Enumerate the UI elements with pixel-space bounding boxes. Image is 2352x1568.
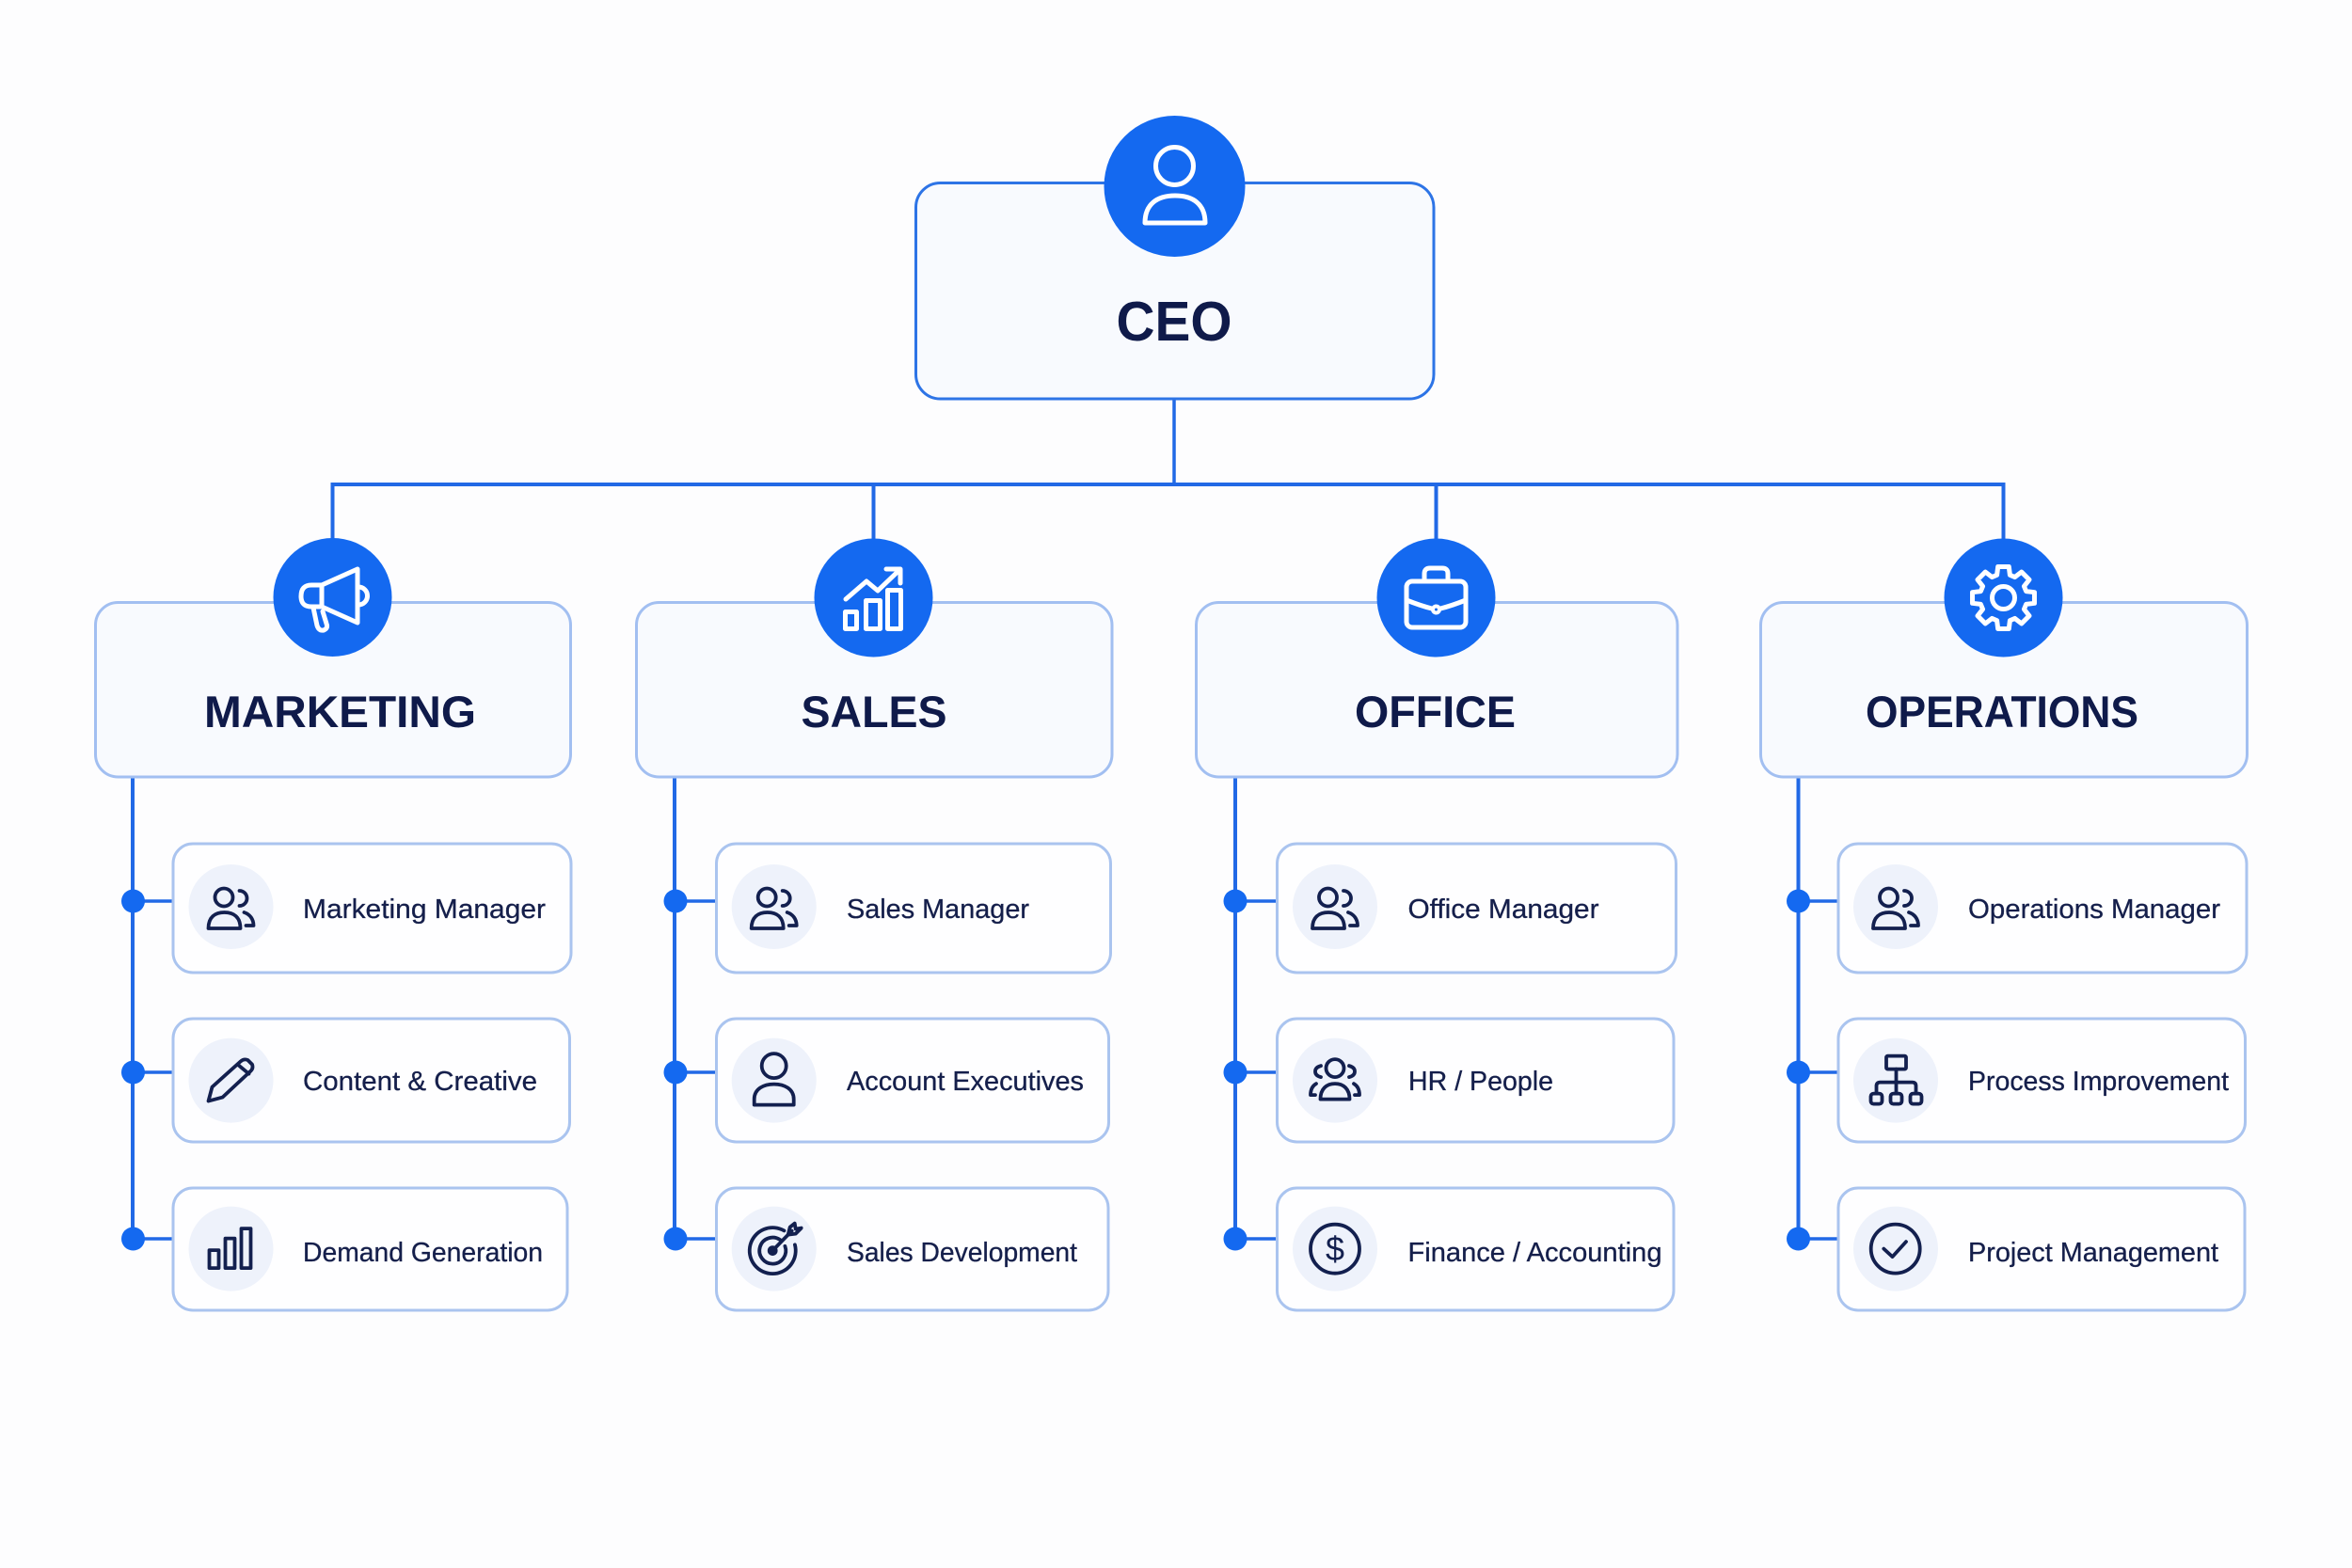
CEO box — [916, 182, 1434, 399]
item: Process Improvement: Process Improvement — [1968, 1067, 2229, 1097]
icon: dollar — [1311, 1225, 1359, 1274]
item: Sales Development — [717, 1188, 1108, 1310]
item: Office Manager: Office Manager — [1407, 895, 1599, 925]
item: HR / People: HR / People — [1408, 1067, 1553, 1097]
connector: CEO to departments — [333, 399, 2004, 541]
icon: manager people — [209, 888, 254, 928]
connector: Office spine — [1223, 777, 1277, 1251]
heading: Operations: OPERATIONS — [1866, 687, 2138, 736]
heading: CEO: CEO — [1116, 291, 1232, 353]
item: HR / People — [1278, 1019, 1674, 1142]
item: Finance / Accounting: Finance / Accounting — [1407, 1238, 1661, 1268]
icon: megaphone — [273, 538, 391, 657]
icon: gear — [1944, 538, 2062, 657]
panel: Marketing column — [96, 538, 571, 1310]
icon: team — [1311, 1059, 1359, 1100]
icon: growth chart — [815, 538, 933, 657]
item: Sales Manager: Sales Manager — [847, 895, 1029, 925]
item: Content & Creative: Content & Creative — [303, 1067, 537, 1097]
icon: person — [755, 1053, 794, 1105]
icon: CEO person — [1104, 116, 1246, 257]
heading: Office: OFFICE — [1355, 687, 1516, 736]
item: Project Management — [1838, 1188, 2245, 1310]
icon: org structure — [1870, 1056, 1921, 1104]
item: Demand Generation: Demand Generation — [303, 1238, 543, 1268]
icon: dollar: $ — [1326, 1229, 1344, 1268]
item: Demand Generation — [173, 1188, 567, 1310]
item: Operations Manager — [1838, 844, 2247, 973]
connector: Sales spine — [664, 777, 716, 1251]
department box: Sales — [636, 602, 1112, 777]
item: Marketing Manager: Marketing Manager — [303, 895, 546, 925]
item: Sales Manager — [717, 844, 1110, 973]
item: Marketing Manager — [173, 844, 571, 973]
item: Finance / Accounting — [1278, 1188, 1674, 1310]
icon: bar chart — [209, 1228, 250, 1268]
heading: Sales: SALES — [802, 687, 946, 736]
connector: Operations spine — [1787, 777, 1838, 1251]
icon: check circle — [1871, 1225, 1920, 1274]
icon: manager people — [752, 888, 797, 928]
department box: Office — [1197, 602, 1677, 777]
item: Account Executives: Account Executives — [847, 1067, 1084, 1097]
item: Operations Manager: Operations Manager — [1968, 895, 2220, 925]
department box: Operations — [1761, 602, 2247, 777]
department box: Marketing — [96, 602, 570, 777]
icon: manager people — [1873, 888, 1918, 928]
item: Office Manager — [1278, 844, 1677, 973]
panel: CEO — [916, 116, 1434, 399]
heading: Marketing: MARKETING — [204, 687, 476, 736]
icon: pencil — [209, 1059, 252, 1101]
panel: Sales column — [636, 538, 1112, 1310]
icon: manager people — [1312, 888, 1358, 928]
item: Process Improvement — [1838, 1019, 2245, 1142]
icon: briefcase — [1377, 538, 1496, 657]
item: Project Management: Project Management — [1968, 1238, 2218, 1268]
item: Account Executives — [717, 1019, 1108, 1142]
item: Content & Creative — [173, 1019, 570, 1142]
icon: target — [750, 1224, 802, 1274]
panel: Office column — [1197, 538, 1677, 1310]
panel: Operations column — [1761, 538, 2247, 1310]
item: Sales Development: Sales Development — [847, 1238, 1077, 1268]
connector: Marketing spine — [121, 777, 173, 1251]
